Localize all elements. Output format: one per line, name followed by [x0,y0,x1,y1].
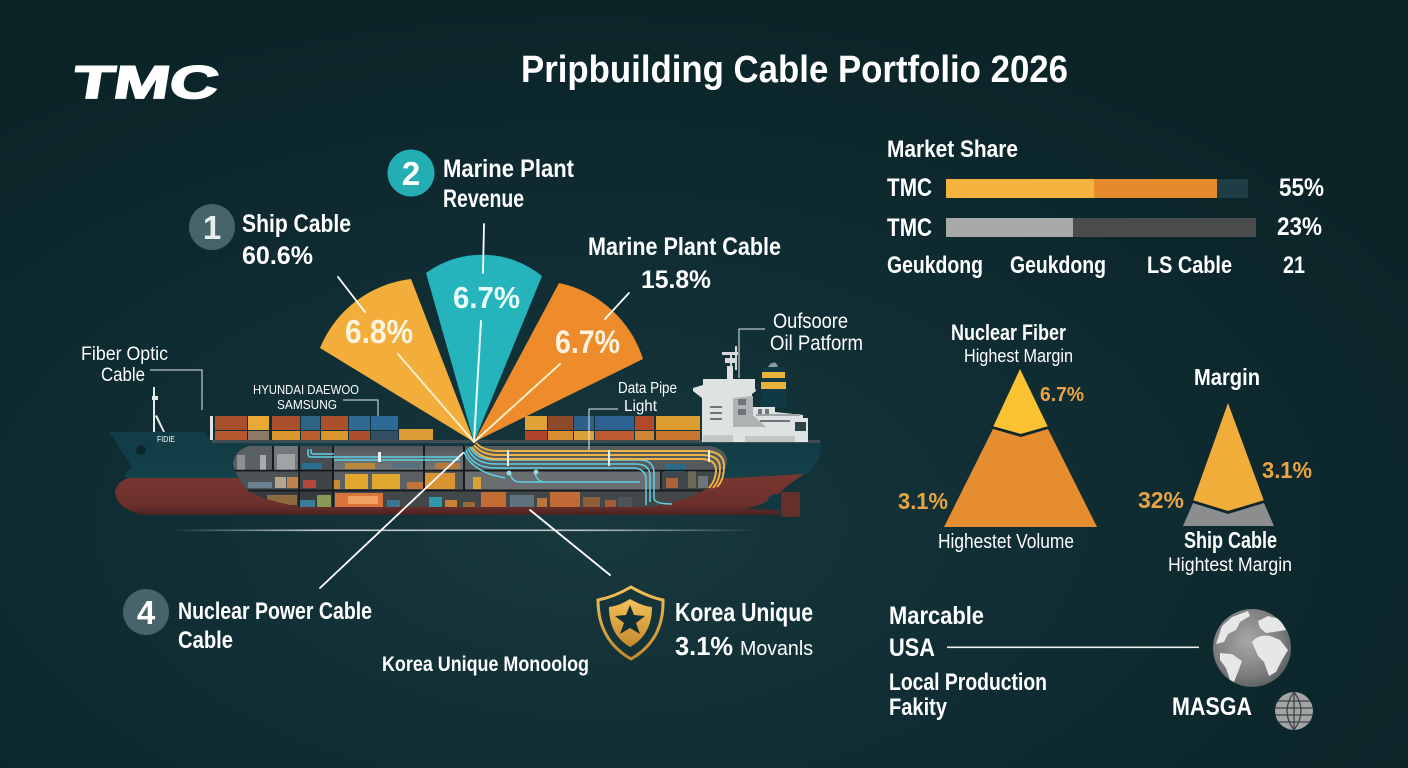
bar: TMC 23%: 23% [1277,213,1322,241]
deck containers [215,416,700,440]
ship cutaway interior [230,444,730,510]
panel: local production: Marcable [889,602,984,630]
icon: shield with star [598,587,663,659]
label 2: marine plant revenue: Marine Plant [443,155,575,183]
wedge value: teal 6.7%: 6.7% [453,280,520,315]
bow mast: FIDIE [157,435,175,444]
row: competitors: 21 [1283,252,1305,279]
row: competitors: Geukdong [887,252,983,279]
title: Pripbuilding Cable Portfolio 2026 [521,49,1068,91]
bar: TMC 55%: TMC [887,174,932,202]
label: MASGA: MASGA [1172,693,1252,721]
pie fan: ship cable wedge [320,279,474,442]
panel: local production: Local Production [889,669,1047,696]
bow mast [152,387,213,444]
label: fiber optic cable [81,344,202,410]
chart: nuclear fiber pyramid: Nuclear Fiber [951,320,1066,345]
row: competitors [887,252,1305,279]
chart: margin pyramid: Ship Cable [1184,527,1277,553]
waterline [170,530,760,531]
label 1: ship cable: Ship Cable [242,210,351,238]
chart: margin pyramid [1138,364,1312,576]
chart: nuclear fiber pyramid: Highestet Volume [938,531,1074,553]
panel: local production: USA [889,634,935,662]
label: marine plant cable: Marine Plant Cable [588,233,781,261]
panel: local production [889,602,1199,721]
bar: TMC 55%: 55% [1279,174,1324,202]
label 2: marine plant revenue: Revenue [443,185,524,213]
cable routing: blue [308,447,672,505]
chart: nuclear fiber pyramid: 3.1% [898,488,948,514]
ship illustration [109,346,821,531]
label: korea unique 3.1%: 3.1% [675,631,733,661]
label: fiber optic cable: Cable [101,365,145,386]
superstructure [693,346,808,442]
label: marine plant cable [588,233,781,294]
chart: nuclear fiber pyramid: 6.7% [1040,384,1084,406]
label 2: marine plant revenue [388,150,575,213]
panel: local production: Fakity [889,694,948,721]
ship hull [109,432,821,517]
label: shipyards: SAMSUNG [277,397,337,412]
label 4: nuclear power cable: Nuclear Power Cable [178,598,372,625]
cable junction glows [378,450,710,476]
label 2: marine plant revenue: 2 [402,155,420,192]
icon: wire globe [1275,692,1313,730]
label: fiber optic cable: Fiber Optic [81,344,168,365]
label 1: ship cable: 1 [203,209,221,246]
bar: TMC 23% [887,213,1322,242]
funnel [760,362,787,408]
icon: globe [1213,609,1291,687]
bar: TMC 55% [887,174,1324,202]
bar: TMC 23%: TMC [887,214,932,242]
wedge value: 6.8%: 6.8% [345,313,413,350]
row: competitors: Geukdong [1010,252,1106,279]
panel: market share [887,136,1324,279]
label: shipyards: HYUNDAI DAEWOO [253,382,359,397]
pie fan: marine plant cable wedge [474,283,643,442]
label: korea unique 3.1%: Movanls [740,638,813,660]
heading: market share: Market Share [887,136,1018,163]
chart: margin pyramid: 3.1% [1262,457,1312,483]
chart: margin pyramid: 32% [1138,487,1184,513]
label: data pipe light: Data Pipe [618,380,677,397]
label: offshore oil platform [739,310,863,378]
label: korea unique 3.1% [675,597,813,661]
logo: TMC: TMC [69,56,223,108]
pie fan: marine plant revenue wedge [426,255,542,442]
label 4: nuclear power cable [123,589,372,654]
wedge value: orange 6.7%: 6.7% [555,324,620,360]
label 4: nuclear power cable: 4 [137,594,156,631]
cable routing: yellow [472,443,724,488]
label 1: ship cable [189,204,351,270]
row: competitors: LS Cable [1147,252,1232,279]
label: korea unique 3.1%: Korea Unique [675,597,813,627]
fan rays [320,224,629,588]
chart: margin pyramid: Margin [1194,364,1260,390]
label: shipyards [253,382,378,416]
label 4: nuclear power cable: Cable [178,627,233,654]
label: offshore oil platform: Oil Patform [770,332,863,355]
label: data pipe light [589,380,677,450]
label: offshore oil platform: Oufsoore [773,310,848,333]
label 1: ship cable: 60.6% [242,242,313,270]
label: korea unique monolog: Korea Unique Monoolog [382,653,589,676]
label: marine plant cable: 15.8% [641,266,711,294]
chart: margin pyramid: Hightest Margin [1168,555,1292,576]
chart: nuclear fiber pyramid [898,320,1097,553]
label: data pipe light: Light [624,398,658,415]
chart: nuclear fiber pyramid: Highest Margin [964,346,1073,366]
